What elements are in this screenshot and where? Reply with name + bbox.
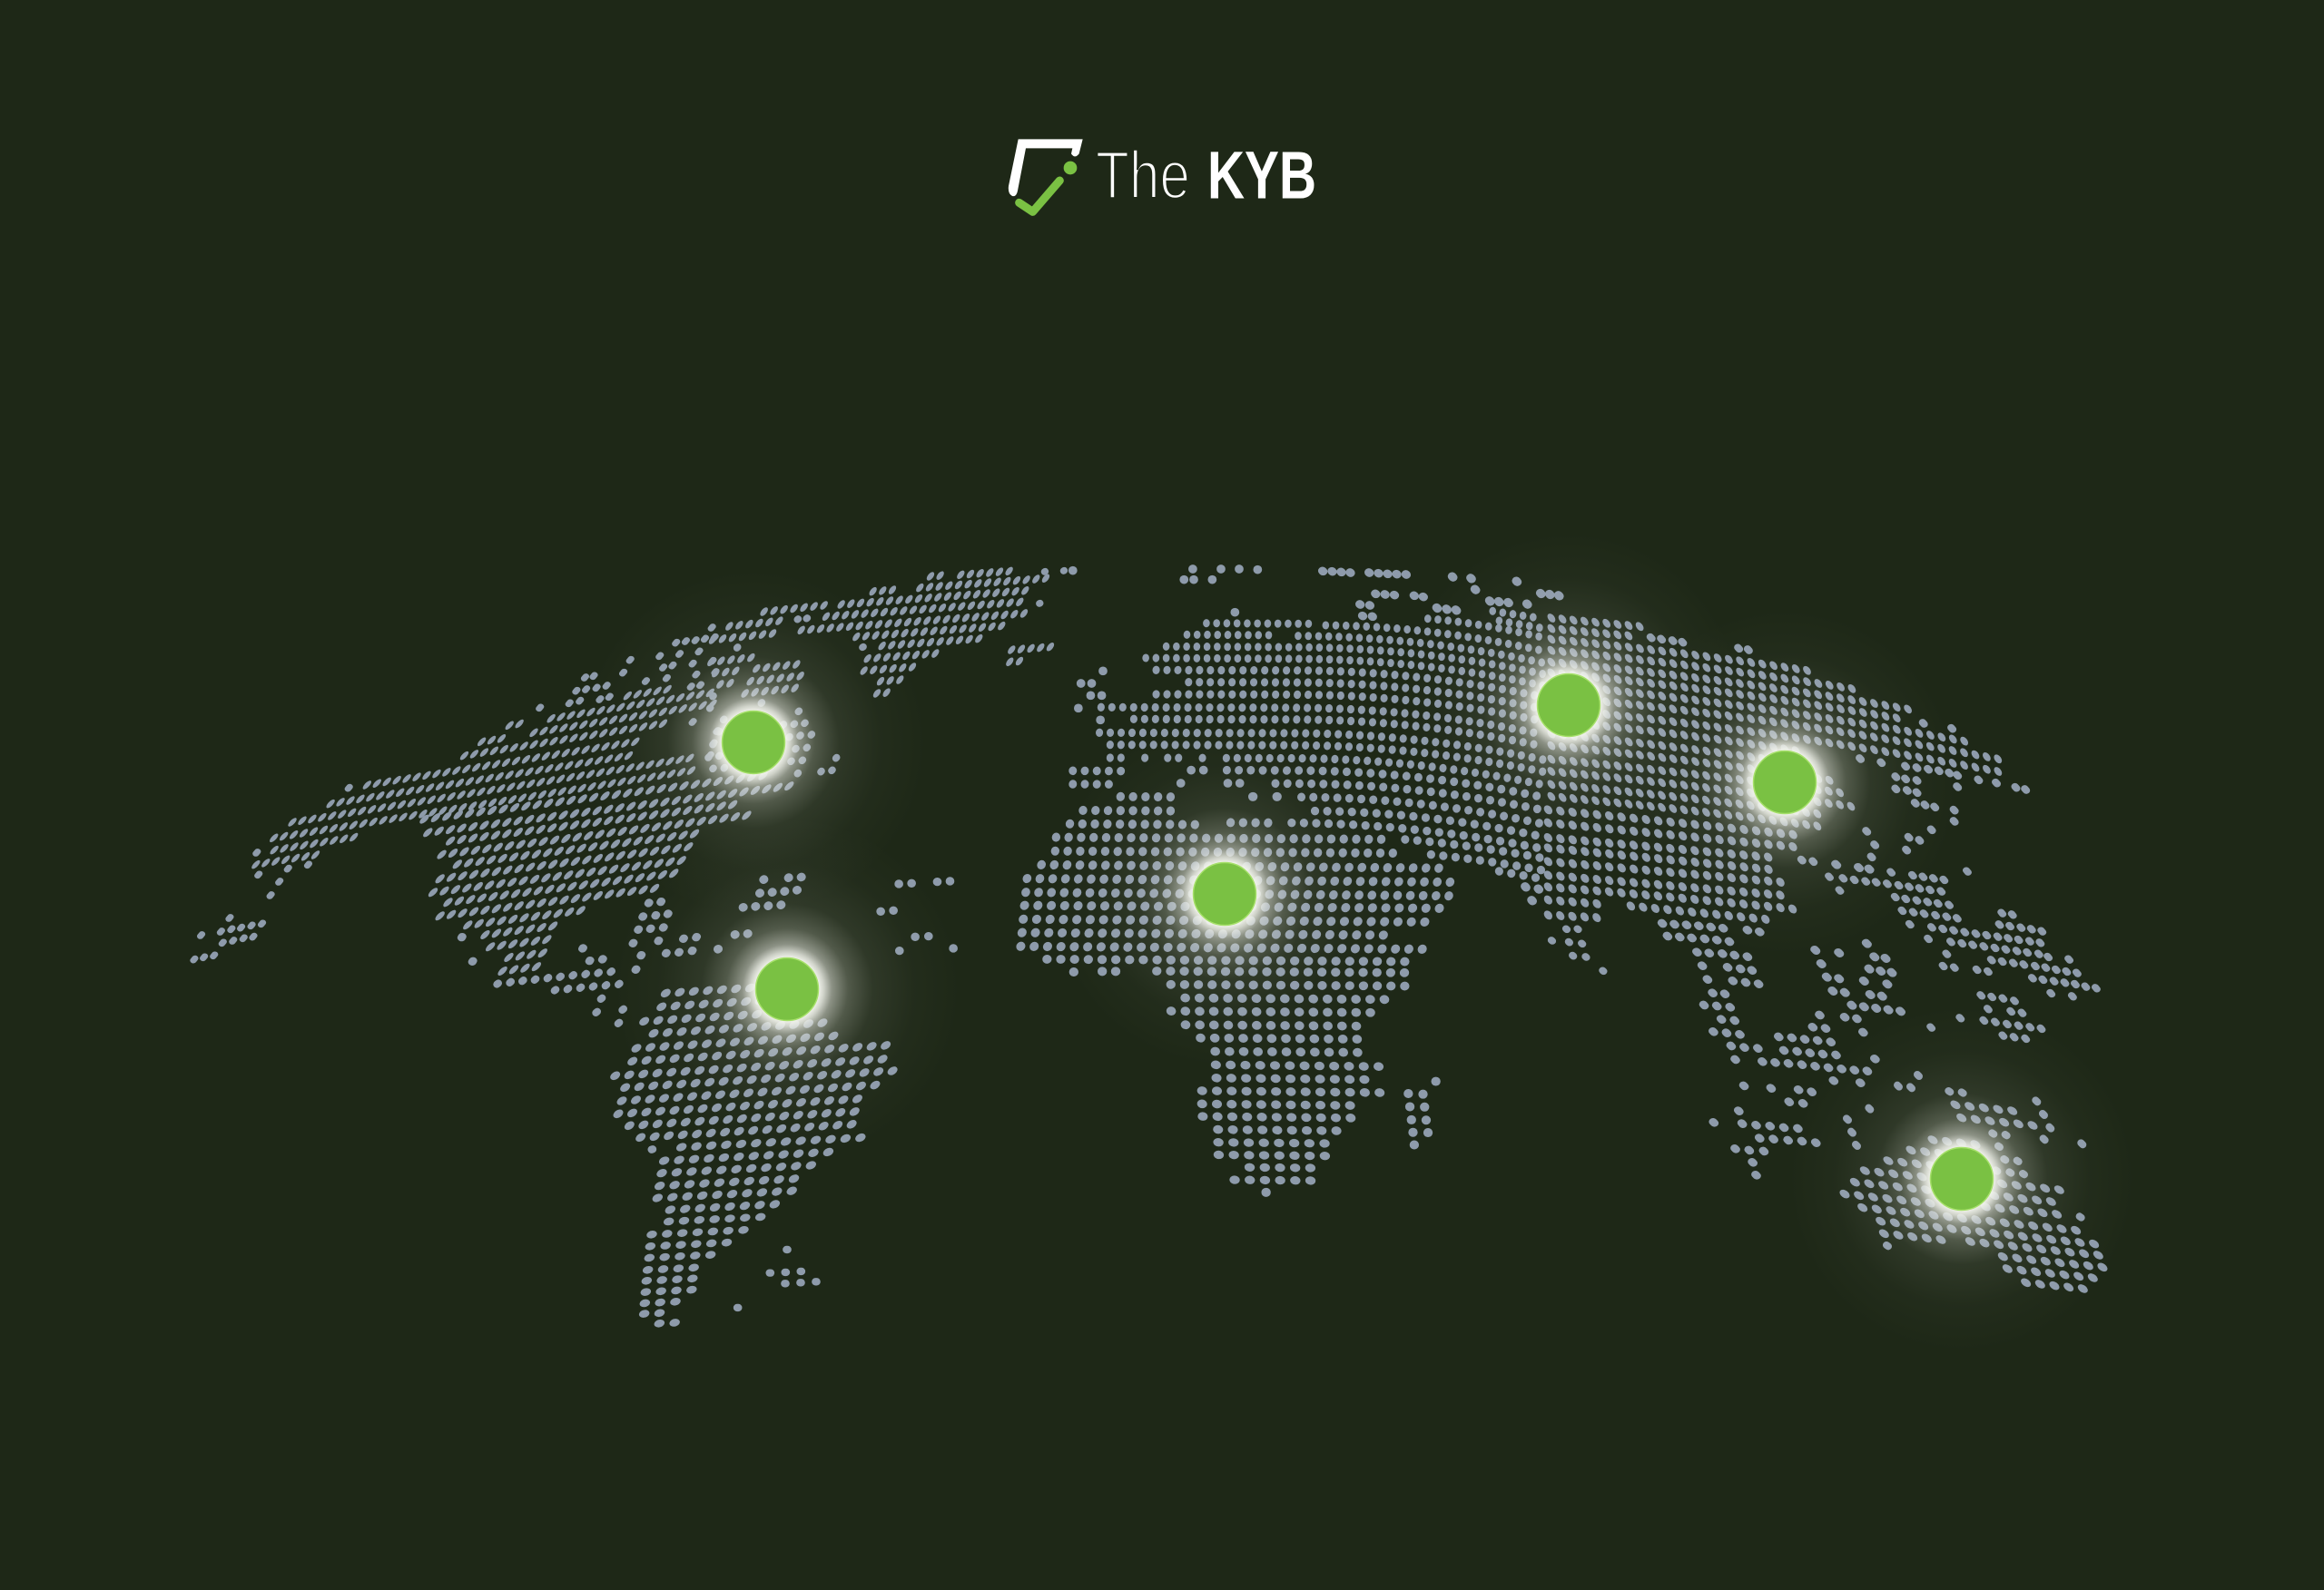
- map region: Central America: [497, 971, 624, 1024]
- glow: Australia: [1758, 975, 2166, 1383]
- dotted world map: [193, 569, 2104, 1323]
- map region: South-East Asia, Japan and Indonesia: [1661, 864, 2097, 1176]
- glow: East Asia: [1581, 578, 1989, 986]
- glow: South America: [583, 785, 991, 1193]
- marker: North America: [723, 712, 784, 773]
- glow: Russia: [1364, 501, 1773, 909]
- map region: Africa: [1020, 797, 1452, 1192]
- marker: East Asia: [1754, 751, 1816, 813]
- logo word: The: The: [1096, 138, 1190, 212]
- icon: shield with check: [1009, 139, 1083, 211]
- marker: Australia: [1930, 1147, 1994, 1211]
- map region: Australia and Pacific islands: [1845, 1075, 2104, 1289]
- marker: Africa: [1193, 862, 1256, 926]
- map region: Europe and western Asia: [1073, 569, 1560, 901]
- map region: North America west: [193, 626, 791, 971]
- map region: eastern Canada and Greenland: [708, 571, 1073, 951]
- logo word: KYB: KYB: [1207, 138, 1316, 212]
- logo: The KYB: [1009, 138, 1316, 212]
- map region: Russia, China and East Asia: [1548, 618, 2026, 971]
- glow: Africa: [1020, 690, 1429, 1098]
- glow: North America: [549, 538, 958, 947]
- map region: South America: [615, 986, 894, 1323]
- marker: South America: [755, 958, 819, 1020]
- marker: Russia: [1538, 673, 1600, 737]
- map region: Caribbean and Atlantic islands: [718, 877, 953, 951]
- glow markers: [549, 501, 2166, 1383]
